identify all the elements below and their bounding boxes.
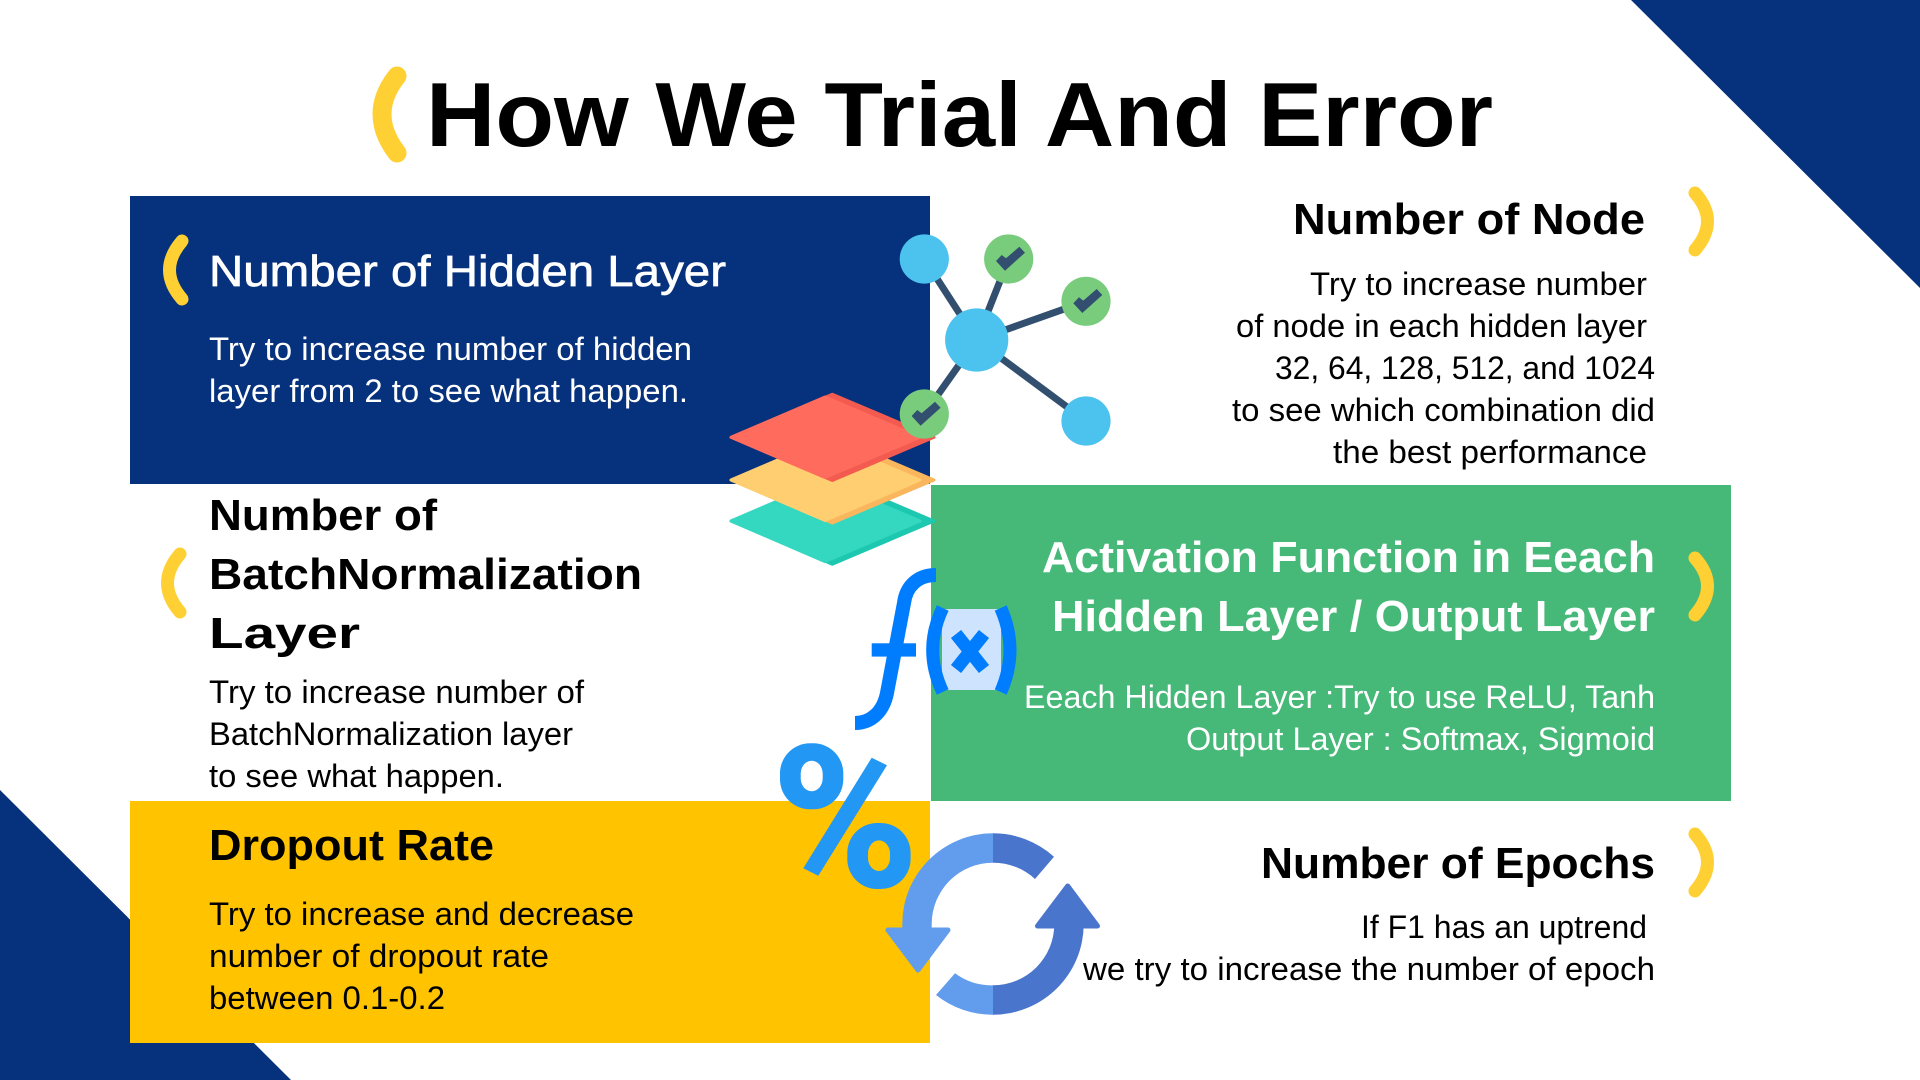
icon: refresh arrows bbox=[888, 833, 1098, 1015]
panel background green bbox=[931, 485, 1731, 801]
bracket bbox=[1695, 558, 1708, 615]
heading: Layer bbox=[209, 609, 360, 658]
body text: the best performance bbox=[1333, 434, 1647, 470]
checked node top bbox=[984, 234, 1033, 284]
heading: Number of Hidden Layer bbox=[209, 247, 726, 296]
body text: of node in each hidden layer bbox=[1236, 308, 1647, 344]
teal layer bbox=[731, 478, 934, 564]
light arrow head bbox=[888, 930, 948, 970]
body text: Try to increase number bbox=[1310, 266, 1647, 302]
body text: number of dropout rate bbox=[209, 938, 549, 974]
heading bbox=[209, 491, 642, 658]
light box bbox=[942, 609, 1001, 690]
letter x bbox=[956, 634, 984, 669]
title bracket bbox=[382, 76, 397, 153]
bracket bbox=[1695, 193, 1708, 250]
centre node bbox=[945, 308, 1008, 372]
body text bbox=[209, 896, 634, 1016]
body text bbox=[1232, 266, 1655, 470]
dark arc bottom right bbox=[993, 920, 1084, 1015]
panel: activation function bbox=[931, 485, 1731, 801]
checked node bottom left bbox=[900, 389, 949, 439]
checked node right bbox=[1061, 277, 1111, 326]
panel: number of hidden layer bbox=[130, 196, 930, 484]
heading: Number of bbox=[209, 491, 437, 540]
icon: node network bbox=[900, 234, 1111, 446]
heading: Hidden Layer / Output Layer bbox=[1052, 592, 1655, 641]
body text: to see which combination did bbox=[1232, 392, 1655, 428]
body text: to see what happen. bbox=[209, 758, 504, 794]
body text bbox=[209, 331, 692, 409]
bracket bbox=[168, 554, 180, 612]
title text: How We Trial And Error bbox=[426, 65, 1493, 166]
connecting lines bbox=[924, 259, 1086, 421]
blue node top left bbox=[900, 234, 949, 284]
percent upper ring bbox=[780, 743, 843, 809]
red layer bbox=[731, 394, 934, 480]
body text: between 0.1-0.2 bbox=[209, 980, 445, 1016]
icon: percent bbox=[780, 743, 911, 889]
panel background yellow bbox=[130, 801, 930, 1043]
letter f bbox=[855, 575, 936, 723]
bracket bbox=[1695, 834, 1708, 891]
bracket bbox=[170, 241, 182, 299]
heading: Number of Node bbox=[1293, 195, 1645, 244]
panel: dropout rate bbox=[130, 801, 930, 1043]
icon: stacked layers bbox=[731, 394, 934, 564]
percent lower ring bbox=[847, 823, 911, 889]
body text: Try to increase number of bbox=[209, 674, 584, 710]
dark arrow head bbox=[1038, 886, 1098, 926]
title bbox=[382, 65, 1493, 166]
body text: Output Layer : Softmax, Sigmoid bbox=[1186, 721, 1655, 757]
heading: Activation Function in Eeach bbox=[1042, 533, 1655, 582]
decorative corner: bottom left bbox=[0, 790, 291, 1080]
decorative corner: top right bbox=[1631, 0, 1920, 288]
heading: Number of Epochs bbox=[1261, 839, 1655, 888]
heading bbox=[1042, 533, 1655, 641]
light arc bottom bbox=[936, 973, 993, 1015]
icon: f(x) function bbox=[855, 575, 1010, 723]
body text bbox=[1024, 679, 1655, 757]
parentheses bbox=[933, 608, 1010, 692]
f crossbar bbox=[872, 643, 916, 657]
panel: number of node bbox=[1232, 193, 1708, 470]
heading: BatchNormalization bbox=[209, 550, 642, 599]
body text: layer from 2 to see what happen. bbox=[209, 373, 688, 409]
percent slash bbox=[803, 758, 887, 876]
body text: Try to increase and decrease bbox=[209, 896, 634, 932]
heading: Dropout Rate bbox=[209, 821, 494, 870]
orange layer bbox=[731, 437, 934, 523]
panel: number of batch normalization layer bbox=[168, 491, 642, 794]
body text: we try to increase the number of epoch bbox=[1082, 951, 1655, 987]
body text bbox=[1082, 909, 1655, 987]
body text: BatchNormalization layer bbox=[209, 716, 573, 752]
panel background navy bbox=[130, 196, 930, 484]
panel: number of epochs bbox=[1082, 834, 1708, 987]
body text: 32, 64, 128, 512, and 1024 bbox=[1275, 350, 1655, 386]
light arc top left bbox=[902, 833, 993, 930]
body text: Eeach Hidden Layer :Try to use ReLU, Tanh bbox=[1024, 679, 1655, 715]
blue node bottom right bbox=[1061, 396, 1111, 446]
body text: Try to increase number of hidden bbox=[209, 331, 692, 367]
body text bbox=[209, 674, 584, 794]
dark arc top right bbox=[993, 833, 1054, 879]
body text: If F1 has an uptrend bbox=[1361, 909, 1647, 945]
